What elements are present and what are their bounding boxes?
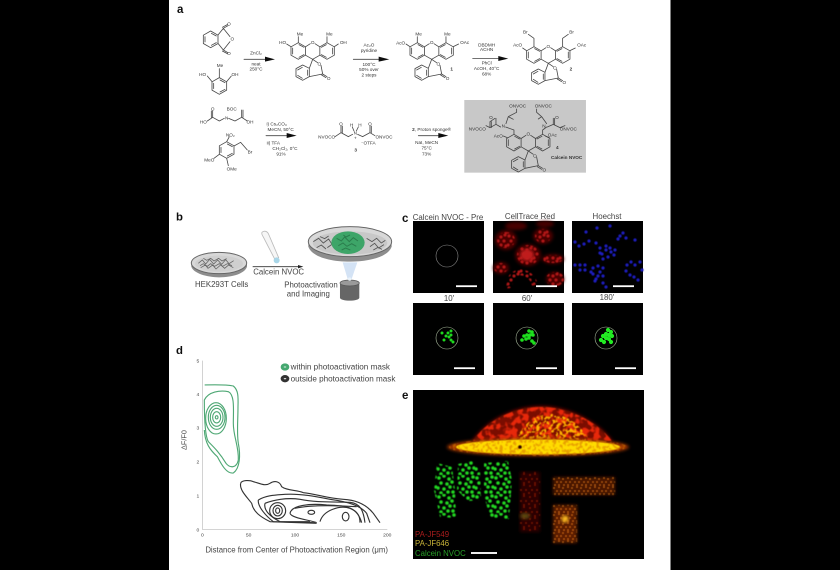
arrow: step 5: NaI, MeCN [415, 140, 438, 145]
nitrobenzyl bromide: Br [248, 150, 253, 155]
compound 2: OAc [577, 42, 587, 47]
compound 2: AcO [513, 42, 523, 47]
methyl fluorescein: OH [340, 40, 347, 45]
iminodiacetate reagent: OH [246, 119, 253, 124]
panel c: microscopy time series [402, 212, 643, 375]
second reaction row [200, 100, 586, 173]
panel e: patterned photoactivation image [402, 390, 644, 559]
axes: 4 [197, 392, 200, 398]
panel titles: 10' [444, 294, 455, 303]
nitrobenzyl bromide: MeO [204, 157, 215, 162]
methyl fluorescein [279, 31, 347, 81]
arrow: step 4: i) Cs₂CO₃ [267, 122, 287, 127]
compound 3: + [354, 135, 357, 140]
image: pre [413, 221, 484, 293]
arrow: step 1: ZnCl₂ [250, 50, 262, 55]
arrow: step 2 [353, 43, 389, 77]
icon: light cone [343, 262, 357, 279]
panel d: contour plot [176, 345, 396, 554]
dish: HEK293T cells [191, 252, 247, 277]
product box: Calcein NVOC: NVOCO [469, 126, 486, 131]
phthalic anhydride [203, 21, 235, 56]
compound 1: OAc [460, 40, 470, 45]
contours: within mask [204, 385, 240, 473]
arrow: step 1: 250°C [249, 67, 263, 72]
product box: Calcein NVOC: ONVOC [509, 103, 527, 108]
arrow: step 3: DBDMH [478, 42, 495, 47]
compound 1: AcO [396, 41, 406, 46]
panel titles: Hoechst [593, 212, 622, 221]
iminodiacetate reagent: O [211, 106, 215, 111]
panel titles: Calcein NVOC - Pre [413, 213, 484, 222]
legend: outside photoactivation mask [291, 374, 396, 383]
product box: Calcein NVOC: 4 [556, 145, 559, 150]
compound 3 [318, 121, 393, 153]
arrow: step 4: CH₂Cl₂, 0°C [272, 146, 298, 151]
panel label d: d [176, 345, 183, 357]
axes: 150 [337, 533, 346, 539]
product box: Calcein NVOC: ONVOC [535, 103, 552, 108]
compound 3: H [358, 122, 362, 127]
image: 180 min [572, 303, 643, 375]
compound 3: H [350, 122, 353, 127]
arrow: step 3: AcOH, 40°C [474, 66, 500, 71]
compound 3: 3 [354, 148, 357, 153]
axes: 2 [197, 459, 200, 465]
iminodiacetate reagent [200, 106, 253, 124]
arrow: step 2: 100°C [362, 62, 376, 67]
image background [413, 390, 644, 559]
axes: 50 [246, 533, 252, 539]
arrow: step 5: 75°C [421, 145, 432, 150]
icon: pipette [262, 231, 280, 263]
compound 3: O [339, 121, 343, 126]
y-axis title: ΔF/F0 [180, 430, 189, 450]
first reaction row [199, 21, 587, 94]
panel a: calcein NVOC synthesis [177, 4, 587, 173]
panel label b: b [176, 211, 183, 223]
nitrobenzyl bromide: OMe [227, 166, 237, 171]
image: 60 min [493, 303, 564, 375]
methyl fluorescein: Me [326, 31, 333, 36]
panel label c: c [402, 213, 409, 225]
phthalic anhydride: O [227, 21, 231, 26]
image: Hoechst [572, 221, 643, 293]
product box: Calcein NVOC: Calcein NVOC [551, 155, 583, 160]
labels b: Photoactivation [284, 280, 338, 289]
compound 3: ⁻OTFA [361, 141, 377, 146]
legend e [415, 530, 466, 558]
methylresorcinol: Me [217, 63, 224, 68]
labels b [195, 268, 338, 299]
legend e: PA-JF646 [415, 539, 449, 548]
panel titles [413, 212, 622, 303]
phthalic anhydride: O [231, 37, 235, 42]
product box: Calcein NVOC: N [502, 123, 505, 128]
panel label a: a [177, 4, 184, 16]
contours: outside mask [241, 481, 380, 523]
arrow: step 5: 73% [422, 151, 431, 156]
methylresorcinol: OH [232, 72, 238, 77]
compound 2: Br [523, 30, 528, 35]
arrow: step 1: neat [251, 62, 261, 67]
methyl fluorescein: Me [297, 31, 304, 36]
panel titles: CellTrace Red [505, 212, 555, 221]
arrow: step 2: pyridine [361, 48, 378, 53]
axes: 200 [383, 533, 392, 539]
dark red stem [520, 472, 540, 532]
green region [434, 461, 512, 519]
compound 3: O [368, 121, 372, 126]
product box: Calcein NVOC: O [555, 115, 559, 120]
panel titles: 60' [522, 294, 533, 303]
panel label e: e [402, 390, 408, 402]
product box: Calcein NVOC: O [489, 115, 493, 120]
iminodiacetate reagent: N [225, 115, 228, 120]
arrow: step 5: 2, Proton sponge® [412, 126, 452, 132]
panel b: experiment schematic [176, 211, 392, 301]
arrow: step 1 [244, 50, 275, 72]
axes: 0 [197, 527, 200, 533]
arrow: step 5 [412, 126, 452, 156]
scale bar [471, 552, 497, 554]
arrow: step 2: Ac₂O [364, 43, 375, 48]
axes: 0 [201, 533, 204, 539]
labels b: HEK293T Cells [195, 280, 248, 289]
legend [281, 363, 396, 383]
product box: Calcein NVOC [464, 100, 586, 173]
icon: objective [340, 277, 359, 301]
axes: 5 [197, 359, 200, 365]
compound 2: Br [569, 30, 574, 35]
iminodiacetate reagent: BOC [227, 106, 237, 111]
methylresorcinol [199, 63, 238, 94]
nitrobenzyl bromide: NO₂ [226, 132, 235, 137]
arrow: Calcein NVOC addition [253, 265, 303, 268]
compound 1: 1 [450, 67, 453, 72]
axes: 100 [291, 533, 299, 539]
legend e: Calcein NVOC [415, 549, 466, 558]
arrow: step 2: 50% over [359, 67, 379, 72]
product box: Calcein NVOC: AcO [494, 134, 503, 139]
axes: 3 [197, 425, 200, 431]
axes [197, 359, 392, 539]
arrow: step 4: ii) TFA [267, 140, 281, 145]
arrow: step 4: MeCN, 50°C [268, 127, 294, 132]
iminodiacetate reagent: HO [200, 119, 207, 124]
product box: Calcein NVOC: ONVOC [560, 126, 577, 131]
methyl fluorescein: HO [279, 40, 287, 45]
arrow: step 3 [473, 42, 508, 76]
mushroom band [447, 438, 629, 456]
labels b: and Imaging [287, 290, 330, 299]
nitrobenzyl bromide [204, 132, 253, 171]
compound 3: N [354, 131, 357, 136]
product box: Calcein NVOC: OAc [548, 133, 557, 138]
arrow: step 3: PhCl [482, 61, 492, 66]
mushroom cap [472, 406, 613, 441]
arrow: step 2: 2 steps [361, 72, 377, 77]
compound 1 [396, 32, 470, 81]
axes: 1 [197, 493, 200, 499]
compound 2 [513, 30, 587, 85]
compound 1: Me [415, 32, 422, 37]
compound 1: Me [444, 32, 451, 37]
product box: Calcein NVOC: N [542, 123, 546, 128]
x-axis title: Distance from Center of Photoactivation Region (μm) [205, 545, 388, 554]
image: CellTrace Red [493, 221, 564, 293]
methylresorcinol: HO [199, 72, 207, 77]
orange vertical bar [553, 505, 577, 543]
arrow: step 3: 68% [482, 71, 491, 76]
arrow: step 4 [266, 122, 298, 156]
arrow: step 3: ACHN [480, 47, 493, 52]
orange horizontal bar [553, 477, 615, 495]
arrow: step 4: 91% [276, 151, 286, 156]
compound 2: 2 [570, 67, 573, 72]
legend e: PA-JF549 [415, 530, 449, 539]
phthalic anhydride: O [227, 51, 231, 56]
dish: photoactivation and imaging [308, 227, 392, 262]
compound 3: NVOCO [318, 134, 336, 139]
image: 10 min [413, 303, 484, 375]
labels b: Calcein NVOC [253, 268, 304, 277]
compound 3: ONVOC [375, 134, 393, 139]
legend: within photoactivation mask [290, 363, 391, 372]
panel titles: 180' [600, 293, 615, 302]
